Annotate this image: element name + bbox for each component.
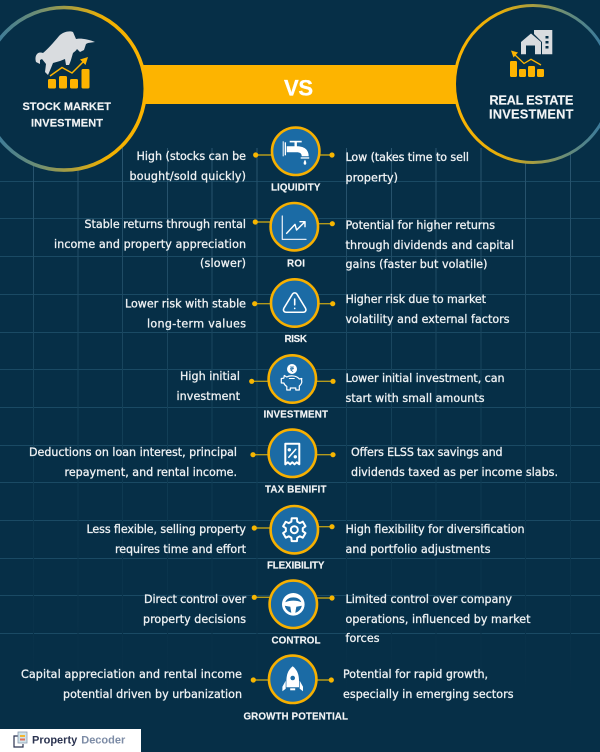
text: investment stock market: Lower initial investment, can bbox=[346, 372, 504, 385]
heading: real estate investment bbox=[489, 93, 574, 122]
row: roi bbox=[54, 203, 514, 271]
text: risk stock market bbox=[346, 293, 510, 326]
text: flexibility real estate bbox=[86, 523, 247, 556]
icon: buildings with chart bbox=[510, 30, 552, 77]
label: risk: RISK bbox=[284, 334, 307, 345]
icon: logo mark bbox=[14, 732, 27, 747]
text: investment stock market bbox=[346, 372, 504, 405]
text: tax real estate: Deductions on loan interest, principal bbox=[29, 446, 237, 459]
connector: investment bbox=[249, 379, 336, 384]
icon: tax receipt bbox=[269, 430, 316, 477]
label: control: CONTROL bbox=[272, 636, 321, 647]
text: flexibility stock market bbox=[346, 523, 524, 556]
connector: roi bbox=[253, 219, 335, 226]
text: roi real estate: Stable returns through rental bbox=[84, 218, 246, 231]
label: growth potential: GROWTH POTENTIAL bbox=[243, 711, 348, 722]
heading: stock market investment bbox=[22, 101, 111, 130]
text: growth stock market: Potential for rapid growth, bbox=[343, 668, 488, 681]
connector: risk bbox=[252, 301, 335, 306]
panel: stock market circle bbox=[0, 8, 145, 170]
text: control real estate: Direct control over bbox=[144, 593, 246, 606]
text: roi real estate bbox=[54, 218, 246, 270]
icon: gear bbox=[271, 506, 318, 553]
connector: flexibility bbox=[252, 524, 335, 531]
text: risk real estate: Lower risk with stable bbox=[125, 298, 246, 311]
text: growth real estate bbox=[21, 668, 242, 701]
label: tax benifit: TAX BENIFIT bbox=[265, 485, 326, 496]
label: flexibility: FLEXIBILITY bbox=[267, 560, 325, 571]
VS banner bbox=[140, 65, 460, 104]
text: tax stock market: dividends taxed as per income slabs. bbox=[351, 466, 558, 479]
icon: bull with rising chart bbox=[35, 31, 95, 88]
text: risk stock market: Higher risk due to market bbox=[346, 293, 487, 306]
text: control stock market: Limited control over company bbox=[346, 593, 512, 606]
connector: growth bbox=[251, 677, 334, 683]
icon: steering wheel bbox=[270, 581, 317, 628]
text: growth stock market: especially in emerging sectors bbox=[343, 688, 514, 701]
text: roi stock market bbox=[346, 219, 514, 271]
row: growth potential bbox=[21, 656, 514, 722]
text: control stock market: forces bbox=[346, 632, 380, 645]
icon: water tap bbox=[272, 128, 319, 175]
text: liquidity real estate: High (stocks can be bbox=[136, 150, 246, 163]
row: control bbox=[143, 581, 531, 647]
text: flexibility stock market: and portfolio adjustments bbox=[346, 543, 491, 556]
text: control stock market bbox=[346, 593, 531, 645]
connector: control bbox=[252, 595, 335, 601]
text: tax stock market bbox=[351, 446, 558, 479]
text: tax stock market: Offers ELSS tax savings and bbox=[351, 446, 502, 459]
text: liquidity real estate: bought/sold quickly) bbox=[130, 170, 246, 183]
text: growth stock market bbox=[343, 668, 514, 701]
row: liquidity bbox=[130, 128, 469, 194]
label: investment: INVESTMENT bbox=[263, 409, 328, 420]
text: tax real estate bbox=[29, 446, 237, 479]
row: tax benefit bbox=[29, 430, 558, 496]
connector: tax bbox=[250, 452, 336, 457]
label: liquidity: LIQUIDITY bbox=[271, 183, 321, 194]
icon: rocket bbox=[269, 656, 316, 703]
text: flexibility real estate: requires time and effort bbox=[115, 543, 247, 556]
text: liquidity stock market: property) bbox=[346, 172, 398, 184]
text: liquidity real estate bbox=[130, 150, 246, 183]
text: control stock market: operations, influenced by market bbox=[346, 613, 531, 626]
text: investment real estate: investment bbox=[176, 390, 241, 403]
text: investment stock market: start with small amounts bbox=[346, 392, 485, 405]
text: roi stock market: gains (faster but volatile) bbox=[346, 258, 488, 271]
heading: real estate investment: REAL ESTATE bbox=[489, 93, 574, 108]
text: investment real estate bbox=[176, 370, 241, 403]
text: investment real estate: High initial bbox=[180, 370, 240, 383]
icon: piggy bank and coin bbox=[269, 355, 316, 403]
logo: property decoder bbox=[0, 729, 141, 752]
row: flexibility bbox=[86, 506, 524, 571]
text: control real estate bbox=[143, 593, 246, 626]
text: liquidity stock market: Low (takes time to sell bbox=[346, 151, 469, 164]
row: investment bbox=[176, 355, 504, 420]
text: tax real estate: repayment, and rental income. bbox=[64, 466, 237, 479]
heading: real estate investment: INVESTMENT bbox=[489, 107, 574, 122]
text: roi stock market: through dividends and capital bbox=[346, 239, 514, 252]
icon: warning triangle bbox=[271, 279, 318, 327]
text: logo wordmark: Property Decoder bbox=[32, 734, 126, 746]
connector: liquidity bbox=[253, 152, 335, 158]
text: flexibility real estate: Less flexible, selling property bbox=[86, 523, 246, 536]
panel: real estate circle bbox=[454, 6, 600, 162]
VS banner: VS bbox=[284, 76, 313, 101]
text: risk real estate: long-term values bbox=[147, 318, 246, 331]
text: roi stock market: Potential for higher returns bbox=[346, 219, 495, 232]
row: risk bbox=[125, 279, 510, 345]
text: roi real estate: income and property appreciation bbox=[54, 238, 246, 251]
text: risk real estate bbox=[125, 298, 246, 331]
text: control real estate: property decisions bbox=[143, 613, 246, 626]
text: growth real estate: Capital appreciation and rental income bbox=[21, 668, 242, 681]
icon: line chart bbox=[271, 203, 318, 250]
label: roi: ROI bbox=[287, 259, 305, 270]
text: flexibility stock market: High flexibility for diversification bbox=[346, 523, 524, 536]
text: liquidity stock market bbox=[346, 151, 469, 184]
text: growth real estate: potential driven by urbanization bbox=[63, 688, 242, 701]
heading: stock market investment: STOCK MARKET bbox=[22, 101, 111, 113]
heading: stock market investment: INVESTMENT bbox=[31, 118, 103, 130]
text: roi real estate: (slower) bbox=[200, 257, 246, 270]
text: risk stock market: volatility and external factors bbox=[346, 313, 510, 326]
